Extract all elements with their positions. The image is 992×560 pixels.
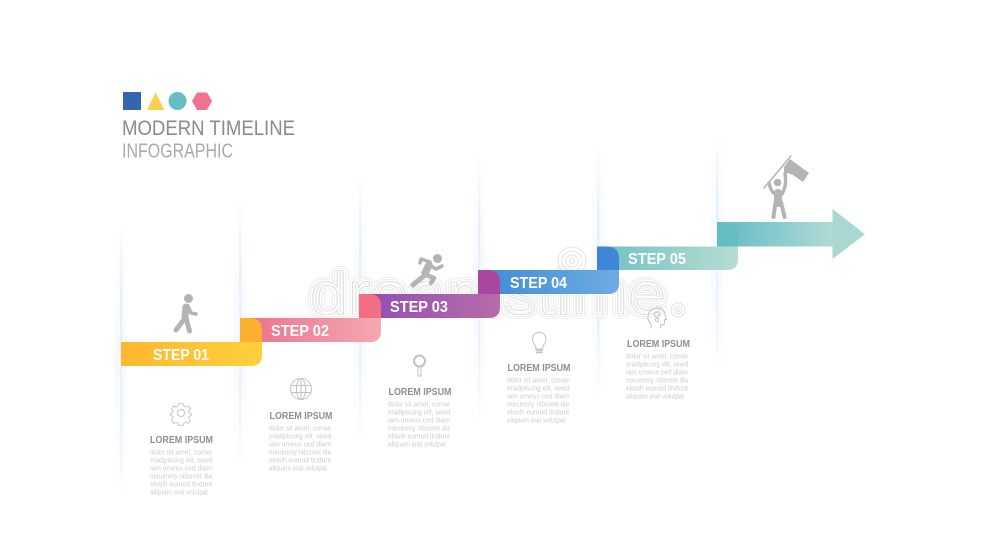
heading: LOREM IPSUM — [388, 386, 452, 398]
heading: LOREM IPSUM — [270, 410, 333, 422]
body text — [388, 402, 450, 448]
watermark — [310, 247, 685, 327]
column guide lines — [115, 130, 723, 495]
body text: eradipiscing elit, sewd — [388, 410, 450, 416]
body text: dolor sit amet, conse — [269, 426, 331, 432]
body text: dolor sit amet, conse — [507, 378, 569, 384]
icon: magnifier — [414, 356, 425, 376]
title: MODERN TIMELINE — [122, 117, 295, 140]
figure: walking person — [176, 294, 196, 331]
body text: elosih eumod tindunt — [626, 386, 688, 392]
body text: eradipiscing elit, sewd — [626, 362, 688, 368]
icon: gear — [171, 404, 191, 425]
body text: elosih eumod tindunt — [507, 410, 569, 416]
figure: person holding flag — [764, 156, 809, 217]
step 02 ribbon: STEP 02 — [271, 323, 329, 340]
icon: pink hexagon — [192, 92, 212, 110]
body text: aliquam erat volutpat — [269, 466, 327, 472]
body text: nonummy nibcreet dia — [150, 474, 212, 480]
body text: aliquam erat volutpat — [626, 394, 684, 400]
watermark: dreamstime — [310, 260, 666, 327]
heading: LOREM IPSUM — [508, 362, 571, 374]
body text: dolor sit amet, conse — [388, 402, 450, 408]
step 05 ribbon — [597, 222, 738, 270]
body text: dolor sit amet, conse — [150, 450, 212, 456]
body text: iam umeus ced diam — [150, 466, 212, 472]
body text: eradipiscing elit, sewd — [150, 458, 212, 464]
subtitle: INFOGRAPHIC — [122, 140, 233, 162]
panel: step 03 details — [388, 356, 452, 448]
panel: step 05 details — [626, 308, 690, 400]
body text — [507, 378, 569, 424]
watermark: dreamstime — [310, 260, 666, 327]
body text: eradipiscing elit, sewd — [269, 434, 331, 440]
body text: iam umeus ced diam — [507, 394, 569, 400]
icon: teal circle — [168, 92, 186, 110]
step 01 ribbon — [121, 318, 262, 366]
body text: nonummy nibcreet dia — [269, 450, 331, 456]
body text — [626, 354, 688, 400]
body text: dolor sit amet, conse — [626, 354, 688, 360]
icon: light bulb — [532, 332, 546, 352]
watermark: dreamstime — [310, 260, 666, 327]
body text: nonummy nibcreet dia — [626, 378, 688, 384]
icon: yellow triangle — [147, 92, 164, 110]
heading: LOREM IPSUM — [150, 434, 213, 446]
step 05 ribbon: STEP 05 — [628, 251, 686, 268]
body text: elosih eumod tindunt — [269, 458, 331, 464]
watermark: dreamstime — [310, 260, 666, 327]
body text: aliquam erat volutpat — [150, 490, 208, 496]
body text: aliquam erat volutpat — [507, 418, 565, 424]
body text: nonummy nibcreet dia — [388, 426, 450, 432]
step 03 ribbon: STEP 03 — [390, 299, 448, 316]
step 02 ribbon — [240, 294, 381, 342]
step 04 ribbon: STEP 04 — [510, 275, 567, 292]
body text: aliquam erat volutpat — [388, 442, 446, 448]
icon: globe — [290, 378, 312, 400]
body text: nonummy nibcreet dia — [507, 402, 569, 408]
body text: elosih eumod tindunt — [150, 482, 212, 488]
body text: iam umeus ced diam — [626, 370, 688, 376]
body text: elosih eumod tindunt — [388, 434, 450, 440]
header: logo shapes and title — [122, 92, 295, 162]
step 01 ribbon: STEP 01 — [153, 347, 209, 364]
icon: head with gears — [648, 308, 666, 328]
watermark: dreamstime — [310, 260, 666, 327]
heading: LOREM IPSUM — [627, 338, 690, 350]
body text: eradipiscing elit, sewd — [507, 386, 569, 392]
figure: running person — [413, 254, 442, 285]
body text: iam umeus ced diam — [388, 418, 450, 424]
arrow — [717, 209, 865, 259]
panel: step 02 details — [269, 378, 333, 472]
step 04 ribbon — [478, 246, 619, 294]
body text: iam umeus ced diam — [269, 442, 331, 448]
body text — [150, 450, 212, 496]
body text — [269, 426, 331, 472]
icon: blue square — [123, 92, 141, 110]
panel: step 01 details — [150, 404, 213, 496]
step 03 ribbon — [359, 270, 500, 318]
panel: step 04 details — [507, 332, 571, 424]
